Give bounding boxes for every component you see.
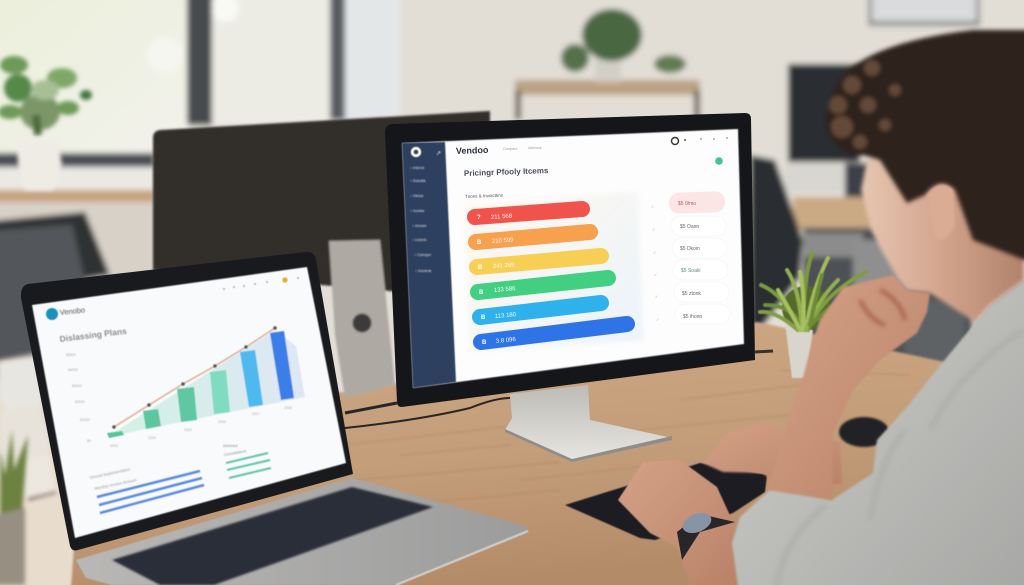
person bbox=[618, 30, 1024, 585]
monitor bezel bbox=[385, 113, 755, 407]
chart backdrop bbox=[465, 192, 643, 352]
hand on chin and forearm bbox=[767, 275, 930, 500]
watch bbox=[677, 509, 735, 560]
monitor stand bbox=[345, 351, 773, 462]
pricing bars: 211 568 bbox=[491, 213, 513, 221]
monitor screen bbox=[402, 129, 744, 388]
laptop base front edge bbox=[396, 531, 528, 585]
desktop monitor bbox=[385, 113, 755, 407]
laptop chart: 2028 bbox=[284, 406, 292, 410]
finger shadows bbox=[860, 290, 905, 325]
laptop lower panels bbox=[89, 444, 271, 513]
laptop chart: $3000 bbox=[72, 384, 82, 388]
sidebar: ○ Intervix bbox=[410, 166, 425, 170]
pricing bars: 3.8 096 bbox=[496, 337, 517, 345]
neck and face bbox=[861, 150, 1024, 322]
laptop chart: 2023 bbox=[110, 444, 118, 448]
notebook and side laptop bbox=[0, 358, 56, 500]
monitor header: Compare bbox=[503, 147, 517, 151]
pricing bars: ? bbox=[477, 215, 481, 221]
sidebar: ○ Ixonlee bbox=[410, 209, 424, 213]
laptop keyboard bbox=[112, 487, 433, 585]
laptop chart: $4000 bbox=[68, 368, 78, 372]
shirt sleeve folds bbox=[775, 330, 1024, 585]
pricing bars: B bbox=[479, 290, 484, 296]
monitor header: Adminok bbox=[528, 146, 542, 150]
back monitor stand bbox=[329, 240, 395, 398]
sidebar: ○ Dokuitik bbox=[410, 179, 426, 183]
pricing bars: 133 586 bbox=[494, 286, 516, 294]
laptop lower panels: Monthly Invoice Amount bbox=[94, 477, 138, 491]
desk plant pot bbox=[785, 323, 813, 378]
shirt bbox=[732, 275, 1024, 585]
window plant bbox=[0, 56, 92, 190]
laptop base bbox=[76, 478, 528, 585]
price pills: $5 ztonk bbox=[682, 291, 701, 297]
sidebar: ○ Coinopel bbox=[414, 253, 431, 257]
laptop chart: $2000 bbox=[75, 400, 85, 404]
laptop header: Dislassing Plans bbox=[59, 326, 128, 344]
laptop chart bbox=[66, 326, 305, 448]
left foreground plant bbox=[0, 430, 28, 585]
monitor header: Tnons & Invoicttins bbox=[465, 193, 504, 199]
price pills: ✓ bbox=[656, 317, 659, 322]
sidebar: ○ Inlonede bbox=[415, 269, 432, 273]
pricing bars bbox=[475, 209, 627, 346]
price pills: ✓ bbox=[653, 250, 656, 255]
back monitor bbox=[153, 111, 490, 398]
laptop lid bbox=[21, 252, 353, 550]
pricing bars: B bbox=[481, 315, 486, 321]
laptop chart: 2027 bbox=[252, 412, 260, 416]
laptop header: Venobo bbox=[59, 305, 86, 317]
laptop header bbox=[46, 277, 299, 344]
sidebar: ○ Liotonk bbox=[412, 238, 427, 242]
desk bbox=[0, 322, 945, 585]
price pills: $5 Soaki bbox=[681, 268, 700, 274]
laptop chart: 2024 bbox=[148, 436, 156, 440]
right hand on keyboard bbox=[703, 422, 842, 488]
hair bbox=[826, 30, 1024, 262]
laptop chart: $0 bbox=[87, 439, 91, 443]
price pills bbox=[651, 191, 730, 324]
price pills: $5 Dkoin bbox=[680, 246, 700, 252]
laptop chart: $1000 bbox=[80, 418, 90, 422]
sidebar: ↗ bbox=[436, 151, 441, 157]
desk plant leaves bbox=[760, 253, 866, 330]
mouse bbox=[839, 417, 889, 447]
laptop chart: 2026 bbox=[218, 420, 226, 424]
price pills: $5 Oann bbox=[680, 224, 699, 230]
laptop lower panels: Consolidations bbox=[223, 449, 247, 457]
pricing bars: B bbox=[477, 240, 482, 246]
ear bbox=[927, 185, 955, 240]
monitor header bbox=[456, 137, 728, 199]
price pills: ✓ bbox=[654, 272, 657, 277]
laptop bbox=[21, 252, 528, 585]
pricing bars: 241 269 bbox=[493, 262, 515, 270]
laptop lower panels: Adminsot bbox=[223, 444, 238, 448]
monitor header: Vendoo bbox=[456, 145, 489, 156]
laptop lower panels: Onnual Implementation bbox=[89, 466, 131, 480]
sidebar: ○ Inlonek bbox=[412, 224, 427, 228]
pricing bars: B bbox=[478, 265, 483, 271]
desk plant bbox=[760, 253, 866, 378]
price pills: ✓ bbox=[655, 294, 658, 299]
laptop chart: 2025 bbox=[184, 428, 192, 432]
price pills: $5 ihonn bbox=[683, 314, 702, 320]
pricing bars: 113 180 bbox=[495, 312, 517, 320]
laptop screen bbox=[32, 267, 346, 538]
pricing bars: 210 599 bbox=[492, 237, 514, 245]
sidebar bbox=[402, 142, 456, 388]
monitor header: Pricingr Pfooly Itcems bbox=[464, 166, 549, 178]
price pills: ✓ bbox=[651, 204, 654, 209]
price pills: ✓ bbox=[652, 227, 655, 232]
pricing bars: B bbox=[482, 340, 487, 346]
keyboard bbox=[565, 463, 767, 540]
price pills: $5 0/mo bbox=[678, 201, 696, 207]
laptop chart: $5500 bbox=[66, 353, 76, 357]
sidebar: ○ Irlinoie bbox=[410, 194, 423, 198]
left hand and wrist bbox=[618, 460, 737, 585]
